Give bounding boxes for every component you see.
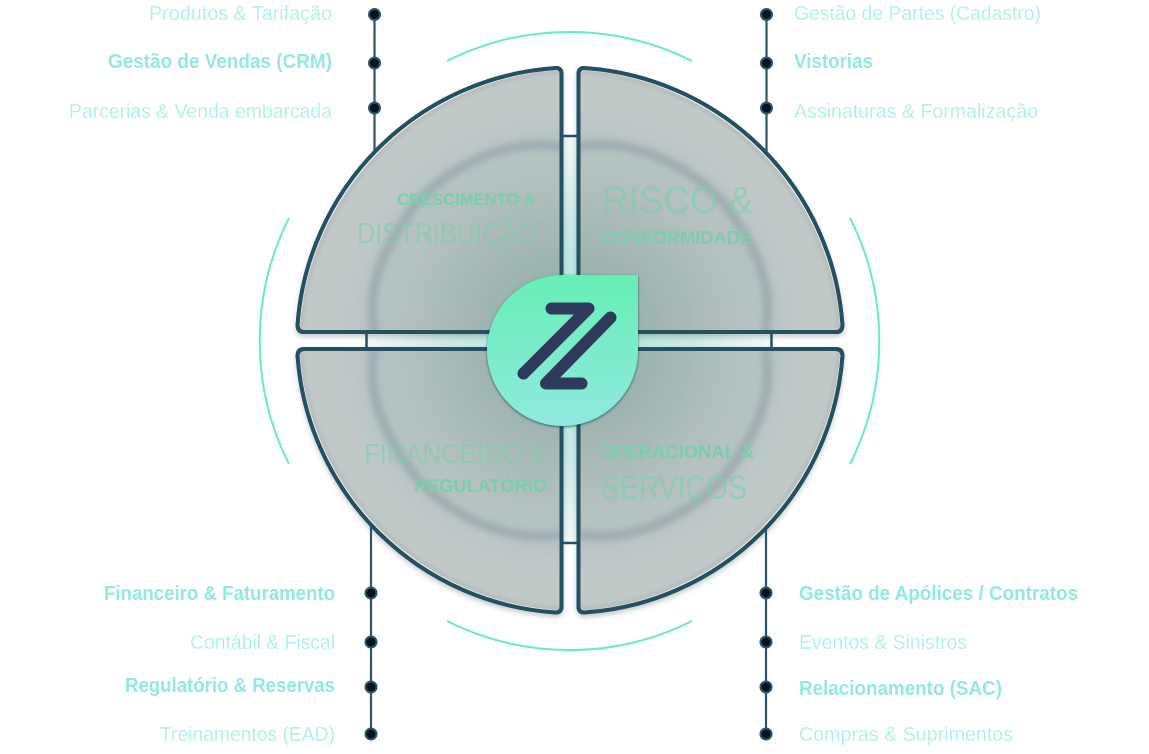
icon: leaf logo [487, 275, 638, 426]
connector strips [366, 136, 772, 544]
timeline: bottom left [366, 522, 376, 740]
list: bottom right items: Relacionamento (SAC) [799, 678, 1002, 700]
heading: regulatório: REGULATÓRIO [414, 475, 547, 496]
heading: distribuição: DISTRIBUIÇÃO [357, 216, 537, 250]
list: bottom left items: Treinamentos (EAD) [160, 724, 335, 746]
list: bottom right items: Eventos & Sinistros [799, 632, 967, 654]
list: top right items: Assinaturas & Formalização [794, 101, 1038, 123]
panel: financeiro e regulatório [298, 346, 568, 612]
timeline: top left [369, 9, 380, 155]
arc: left [260, 218, 289, 464]
list: top right items: Vistorias [794, 51, 873, 73]
list: bottom left items: Financeiro & Faturamento [104, 583, 335, 605]
timeline: top right [761, 9, 772, 155]
list: bottom left items: Regulatório & Reservas [125, 675, 335, 697]
panel: crescimento e distribuição [298, 68, 568, 335]
list: bottom left items [104, 583, 335, 746]
list: top left items: Parcerias & Venda embarcada [69, 101, 333, 123]
heading: conformidade: CONFORMIDADE [601, 228, 752, 248]
heading: serviços: SERVIÇOS [601, 469, 747, 507]
arc: right [850, 218, 879, 464]
list: bottom right items [799, 583, 1078, 746]
panel: risco e conformidade [572, 68, 842, 335]
list: bottom left items: Contábil & Fiscal [190, 632, 335, 654]
list: top right items [794, 3, 1041, 123]
timeline: bottom right [760, 522, 772, 740]
list: top left items: Produtos & Tarifação [149, 3, 332, 25]
arc: bottom [447, 621, 692, 650]
panel: operacional e serviços [572, 346, 842, 612]
list: top left items: Gestão de Vendas (CRM) [108, 51, 332, 73]
list: top right items: Gestão de Partes (Cadastro) [794, 3, 1041, 25]
list: bottom right items: Gestão de Apólices / Contratos [799, 583, 1078, 605]
heading: operacional: OPERACIONAL & [600, 442, 754, 462]
heading: risco: RISCO & [602, 180, 753, 222]
heading: financeiro: FINANCEIRO & [364, 438, 547, 469]
heading: crescimento: CRESCIMENTO & [397, 190, 536, 209]
arc: top [447, 32, 692, 61]
list: bottom right items: Compras & Suprimentos [799, 724, 1013, 746]
list: top left items [69, 3, 333, 123]
